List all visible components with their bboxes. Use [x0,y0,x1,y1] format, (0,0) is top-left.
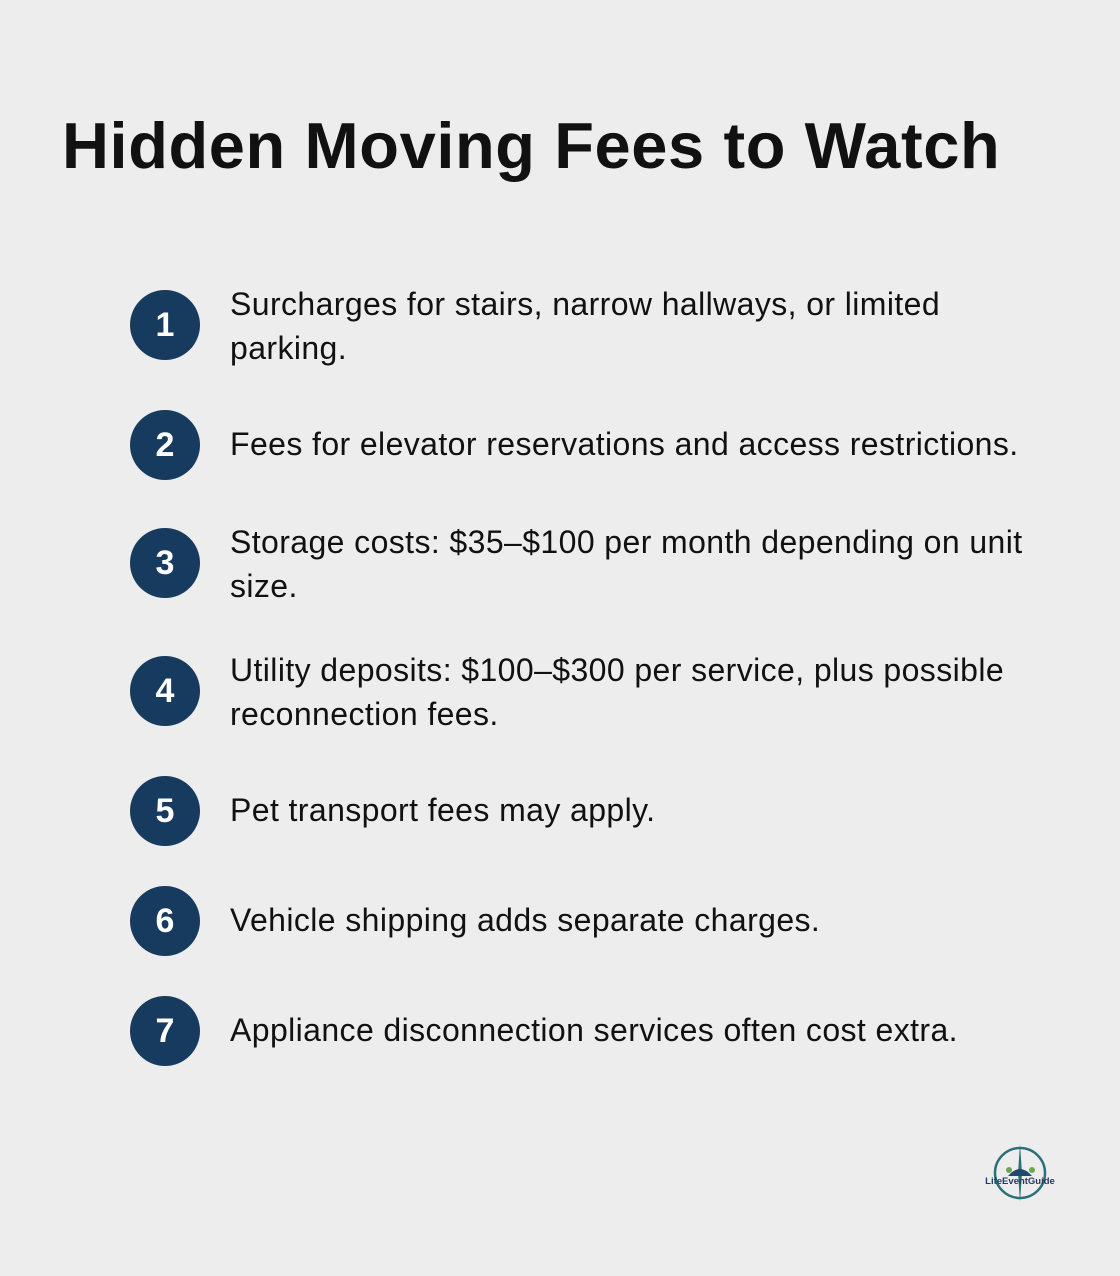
item 7 [130,996,958,1066]
text 3: size. [230,568,298,604]
badge 6 [130,886,200,956]
item 1 [130,286,940,366]
logo [985,1144,1055,1202]
text 2: Fees for elevator reservations and access restrictions. [230,426,1019,462]
badge 7: 7 [156,1012,174,1050]
item 4 [130,652,1004,732]
text 1: parking. [230,330,347,366]
text 3: Storage costs: $35–$100 per month depending on unit [230,524,1023,560]
item 3 [130,524,1023,604]
text 7: Appliance disconnection services often cost extra. [230,1012,958,1048]
badge 3: 3 [156,544,174,582]
badge 4: 4 [156,672,174,710]
text 4: Utility deposits: $100–$300 per service, plus possible [230,652,1004,688]
text 1: Surcharges for stairs, narrow hallways, or limited [230,286,940,322]
badge 1: 1 [156,306,174,344]
item 5 [130,776,655,846]
badge 2 [130,410,200,480]
badge 2: 2 [156,426,174,464]
item 2 [130,410,1019,480]
badge 7 [130,996,200,1066]
logo: LifeEventGuide [985,1176,1055,1187]
text 1 [230,286,940,366]
title: Hidden Moving Fees to Watch [62,109,1000,182]
text 5: Pet transport fees may apply. [230,792,655,828]
badge 5 [130,776,200,846]
badge 3 [130,528,200,598]
text 4: reconnection fees. [230,696,499,732]
text 6: Vehicle shipping adds separate charges. [230,902,820,938]
badge 5: 5 [156,792,174,830]
badge 4 [130,656,200,726]
item 6 [130,886,820,956]
badge 6: 6 [156,902,174,940]
text 3 [230,524,1023,604]
badge 1 [130,290,200,360]
text 4 [230,652,1004,732]
